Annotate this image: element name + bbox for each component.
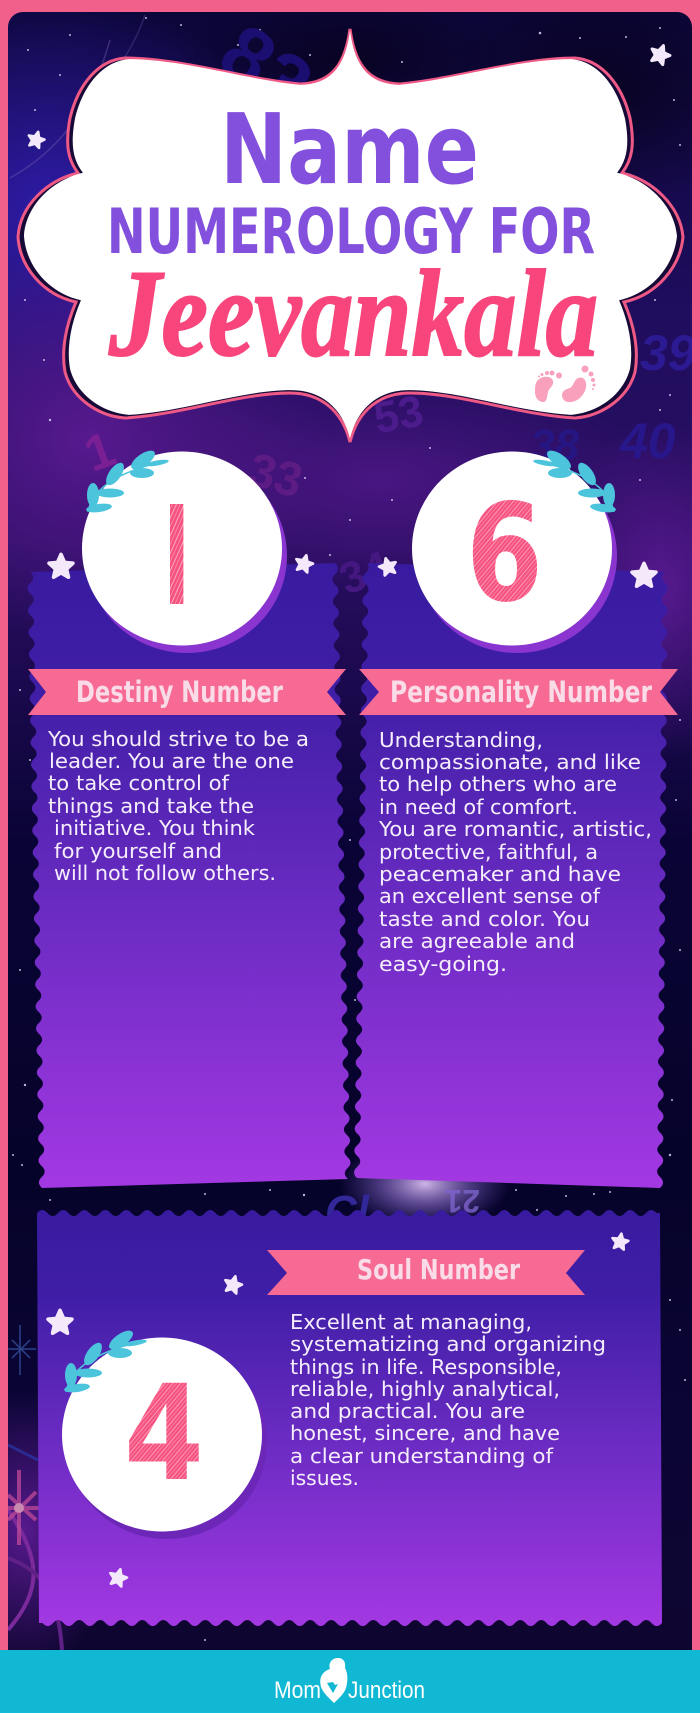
personality text block: Understanding, [379, 728, 543, 752]
panel: soul number [37, 1210, 662, 1626]
soul text block: things in life. Responsible, [290, 1355, 562, 1379]
badge outline [18, 29, 683, 442]
personality text block: in need of comfort. [379, 795, 578, 819]
personality text block: easy-going. [379, 952, 507, 976]
panel background [28, 563, 350, 1188]
soul text block: reliable, highly analytical, [290, 1377, 560, 1401]
destiny text block: to take control of [48, 771, 230, 795]
personality text block: to help others who are [379, 772, 617, 796]
starry night background: 33 [243, 444, 308, 509]
soul text block: and practical. You are [290, 1399, 525, 1423]
soul text block: Excellent at managing, [290, 1310, 532, 1334]
personality text block: an excellent sense of [379, 884, 601, 908]
number circle: 6 [412, 447, 617, 653]
ribbon: destiny number [28, 669, 346, 715]
starry night background: 1 [77, 420, 122, 483]
logo icon [320, 1658, 347, 1703]
destiny text block: You should strive to be a [47, 727, 309, 751]
panel background [37, 1210, 662, 1626]
logo: MomJunction [274, 1658, 425, 1704]
title line: Jeevankala: Jeevankala [108, 245, 598, 382]
personality text block: You are romantic, artistic, [378, 817, 652, 841]
destiny text block: things and take the [48, 794, 254, 818]
starry night background: Cl [325, 1187, 370, 1236]
starry night background: 21 [444, 1183, 480, 1219]
badge white fill [24, 30, 677, 439]
starry night background: 53 [370, 386, 427, 443]
panel: personality number [354, 447, 678, 1188]
soul text block: a clear understanding of [290, 1444, 554, 1468]
soul text block: honest, sincere, and have [290, 1421, 560, 1445]
number circle: 4: 4 [124, 1357, 204, 1511]
number circle: 1: 1 [132, 397, 209, 692]
starry night background: 83 [204, 7, 328, 131]
personality text block: taste and color. You [379, 907, 590, 931]
personality text block [378, 728, 652, 976]
ribbon: personality number [359, 669, 678, 715]
soul text block [290, 1310, 606, 1490]
panel background [354, 562, 668, 1188]
destiny text block: leader. You are the one [49, 749, 294, 773]
title badge [18, 29, 683, 442]
starry night background: 40 [619, 413, 676, 469]
personality text block: compassionate, and like [379, 750, 641, 774]
destiny text block [47, 727, 309, 885]
logo wordmark [274, 1677, 425, 1704]
ribbon: soul number [267, 1250, 585, 1295]
number circle: 4 [62, 1327, 267, 1539]
destiny text block: for yourself and [54, 839, 222, 863]
personality text block: peacemaker and have [379, 862, 621, 886]
logo wordmark: Mom [274, 1677, 321, 1704]
starry night background: 34 [333, 541, 396, 604]
soul text block: issues. [290, 1466, 359, 1490]
starry night background: 39 [640, 325, 696, 381]
number circle: 1 [82, 450, 287, 653]
ribbon: destiny number: Destiny Number [76, 675, 284, 709]
logo wordmark: Junction [348, 1677, 425, 1704]
personality text block: are agreeable and [379, 929, 575, 953]
soul text block: systematizing and organizing [290, 1332, 606, 1356]
title line: Name: Name [220, 93, 479, 206]
panel: destiny number [28, 397, 350, 1188]
personality text block: protective, faithful, a [379, 840, 598, 864]
number circle: 6: 6 [466, 475, 543, 632]
destiny text block: will not follow others. [54, 861, 276, 885]
destiny text block: initiative. You think [54, 816, 255, 840]
ribbon: soul number: Soul Number [357, 1253, 520, 1286]
icon: baby footprints [535, 366, 596, 402]
starry night background: 38 [530, 421, 579, 470]
footer bar [0, 1650, 700, 1713]
